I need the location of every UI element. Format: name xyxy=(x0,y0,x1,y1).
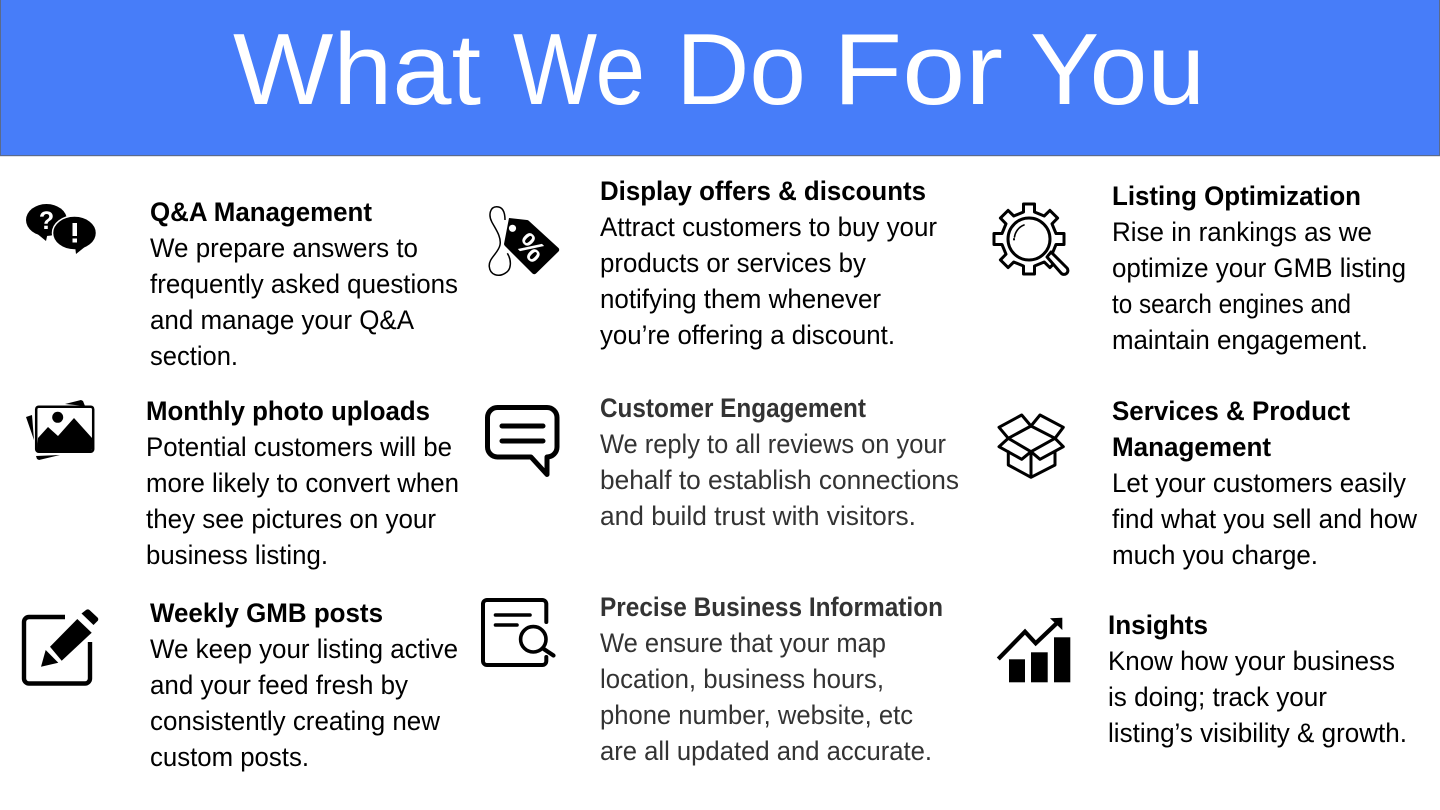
text block: Listing Optimization: Listing Optimization xyxy=(1112,181,1361,211)
text block: Q&A Management: frequently asked questions xyxy=(150,269,458,299)
text block: Customer Engagement: and build trust with visitors. xyxy=(600,501,916,531)
text block: Precise Business Information: We ensure that your map xyxy=(600,628,886,658)
text block: Services & Product Management: much you charge. xyxy=(1112,540,1318,570)
text block: Insights: is doing; track your xyxy=(1108,682,1327,712)
text block: Precise Business Information: are all updated and accurate. xyxy=(600,736,932,766)
title: For xyxy=(833,14,1003,126)
text block: Monthly photo uploads: Monthly photo uploads xyxy=(146,396,430,426)
text block: Display offers & discounts: Display offers & discounts xyxy=(600,176,926,206)
icon: question and exclamation speech bubbles xyxy=(26,204,96,254)
text block: Weekly GMB posts: custom posts. xyxy=(150,742,309,772)
text block: Customer Engagement xyxy=(600,393,959,531)
text block: Weekly GMB posts: consistently creating new xyxy=(150,706,441,736)
text block: Weekly GMB posts: and your feed fresh by xyxy=(150,670,409,700)
text block: Services & Product Management: Management xyxy=(1112,432,1271,462)
text block: Q&A Management: We prepare answers to xyxy=(150,233,418,263)
icon: edit pencil in square xyxy=(24,609,98,684)
icon: gear with magnifying glass xyxy=(994,204,1068,274)
text block: Precise Business Information: phone number, website, etc xyxy=(600,700,913,730)
text block: Insights: Know how your business xyxy=(1108,646,1395,676)
text block: Weekly GMB posts xyxy=(150,598,458,772)
text block: Listing Optimization xyxy=(1112,181,1406,355)
header banner xyxy=(0,0,1440,156)
icon: discount price tag: % xyxy=(509,227,552,269)
text block: Services & Product Management: Services & Product xyxy=(1112,396,1350,426)
text block: Insights: Insights xyxy=(1108,610,1208,640)
text block: Display offers & discounts: notifying them whenever xyxy=(600,284,881,314)
text block: Listing Optimization: optimize your GMB listing xyxy=(1112,253,1406,283)
text block: Precise Business Information: location, business hours, xyxy=(600,664,884,694)
title: Do xyxy=(676,14,806,126)
icon: document with magnifier xyxy=(483,600,554,665)
text block: Weekly GMB posts: Weekly GMB posts xyxy=(150,598,383,628)
text block: Display offers & discounts: Attract customers to buy your xyxy=(600,212,937,242)
text block: Precise Business Information: Precise Business Information xyxy=(600,592,943,622)
text block: Listing Optimization: Rise in rankings as we xyxy=(1112,217,1372,247)
text block: Customer Engagement: behalf to establish connections xyxy=(600,465,959,495)
icon: open box xyxy=(999,415,1063,477)
text block: Q&A Management: and manage your Q&A xyxy=(150,305,414,335)
icon: photo stack xyxy=(26,400,93,460)
title: We xyxy=(513,14,645,126)
text block: Display offers & discounts: you’re offering a discount. xyxy=(600,320,895,350)
icon: question and exclamation speech bubbles: ? xyxy=(39,207,54,235)
text block: Monthly photo uploads: they see pictures on your xyxy=(146,504,436,534)
text block: Services & Product Management: Let your customers easily xyxy=(1112,468,1407,498)
text block: Display offers & discounts: products or services by xyxy=(600,248,867,278)
title xyxy=(233,14,1205,126)
text block: Q&A Management: section. xyxy=(150,341,238,371)
text block: Precise Business Information xyxy=(600,592,943,766)
text block: Services & Product Management: find what you sell and how xyxy=(1112,504,1418,534)
icon: discount price tag xyxy=(489,207,559,275)
text block: Monthly photo uploads: business listing. xyxy=(146,540,328,570)
title: What xyxy=(233,14,481,126)
text block: Monthly photo uploads xyxy=(146,396,459,570)
text block: Listing Optimization: maintain engagement. xyxy=(1112,325,1368,355)
text block: Display offers & discounts xyxy=(600,176,937,350)
text block: Monthly photo uploads: more likely to convert when xyxy=(146,468,459,498)
text block: Customer Engagement: We reply to all reviews on your xyxy=(600,429,946,459)
title: You xyxy=(1030,14,1205,126)
icon: chat bubble xyxy=(488,408,557,474)
text block: Monthly photo uploads: Potential customers will be xyxy=(146,432,452,462)
text block: Insights: listing’s visibility & growth. xyxy=(1108,718,1407,748)
text block: Listing Optimization: to search engines and xyxy=(1112,289,1351,319)
text block: Insights xyxy=(1108,610,1407,748)
text block: Weekly GMB posts: We keep your listing active xyxy=(150,634,458,664)
text block: Customer Engagement: Customer Engagement xyxy=(600,393,866,423)
icon: growth bar chart with arrow xyxy=(998,618,1070,682)
text block: Services & Product Management xyxy=(1112,396,1418,570)
text block: Q&A Management: Q&A Management xyxy=(150,197,372,227)
text block: Q&A Management xyxy=(150,197,458,371)
